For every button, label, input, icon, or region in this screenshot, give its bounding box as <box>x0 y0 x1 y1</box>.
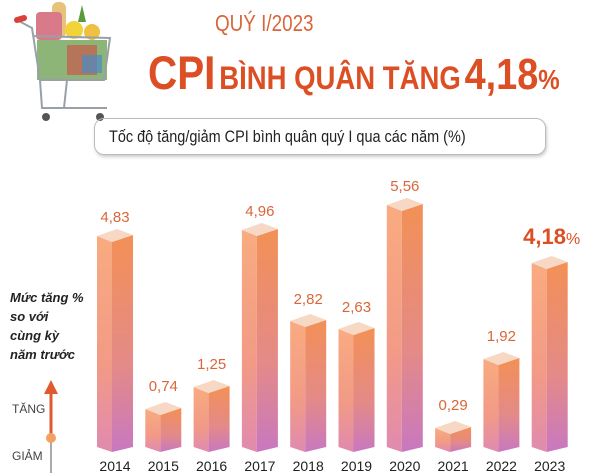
subtitle box <box>94 118 546 155</box>
title: CPI BÌNH QUÂN TĂNG 4,18% <box>148 46 560 99</box>
bars: 4,96 <box>245 203 275 220</box>
year labels <box>99 458 565 473</box>
icon: shopping cart <box>14 2 112 121</box>
bars: 2,82 <box>294 291 323 308</box>
bars: 4,18% <box>523 224 580 249</box>
bars: 1,25 <box>197 356 226 373</box>
axis note <box>10 290 84 362</box>
axis note: Mức tăng % <box>10 290 84 305</box>
arrow: increase <box>44 380 58 473</box>
axis note: so với <box>10 309 48 324</box>
subtitle text: Tốc độ tăng/giảm CPI bình quân quý I qua các năm (%) <box>109 127 466 146</box>
bars: 2,63 <box>342 299 371 316</box>
bars: 4,83 <box>100 209 130 226</box>
bars: 5,56 <box>390 178 419 195</box>
label: giảm: GIẢM <box>12 449 43 463</box>
label: tăng: TĂNG <box>12 402 45 416</box>
bars <box>97 178 580 452</box>
axis note: cùng kỳ <box>10 328 59 343</box>
bars: 0,29 <box>438 397 468 414</box>
axis note: năm trước <box>10 347 75 362</box>
bars: 0,74 <box>149 378 178 395</box>
heading: quarter: QUÝ I/2023 <box>215 10 314 36</box>
bars: 1,92 <box>487 328 516 345</box>
bar chart <box>97 178 580 473</box>
